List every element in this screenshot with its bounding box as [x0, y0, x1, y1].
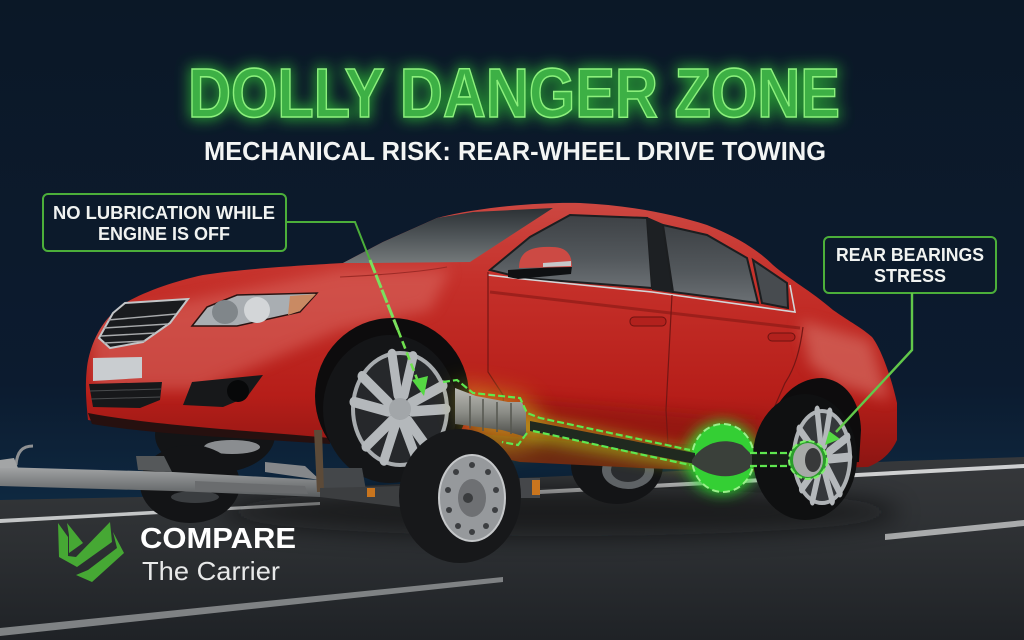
- transmission: [455, 388, 526, 437]
- dolly rim: [439, 455, 505, 541]
- side mirror: [508, 247, 572, 279]
- sill: [465, 430, 755, 472]
- wheel arches: [315, 318, 469, 474]
- far-side wheels: [140, 397, 663, 523]
- windshield: [343, 208, 553, 263]
- driveshaft: [530, 421, 695, 464]
- dolly tyre: [399, 429, 521, 563]
- tow dolly: [0, 429, 540, 563]
- deck plates: [0, 458, 18, 468]
- differential halo: [692, 424, 754, 492]
- rear wheel: [753, 394, 857, 520]
- hitch: [16, 446, 33, 465]
- logo text: COMPARE: [140, 523, 296, 555]
- callout: rear bearings: STRESS: [874, 266, 946, 286]
- title: DOLLY DANGER ZONE: [188, 54, 840, 132]
- door seams: [488, 272, 803, 445]
- logo text: [140, 523, 296, 586]
- window trim: [488, 275, 795, 312]
- car body: [86, 203, 897, 474]
- logo text: The Carrier: [142, 556, 280, 586]
- callout: no lubrication: NO LUBRICATION WHILE: [53, 203, 275, 223]
- rear window: [663, 225, 758, 303]
- door handles: [630, 317, 795, 341]
- right reflector: [520, 478, 540, 498]
- body shell: [86, 203, 897, 470]
- bumper lip: [88, 413, 330, 444]
- road: [0, 457, 1024, 640]
- body highlights: [90, 270, 890, 452]
- strap: [314, 430, 324, 492]
- grille: [99, 299, 188, 348]
- secondary bar: [195, 481, 308, 494]
- fog lamp: [183, 375, 263, 407]
- axle bar: [320, 486, 400, 507]
- lower grille: [89, 382, 162, 408]
- logo mark: [58, 522, 124, 582]
- dolly deck: [320, 468, 366, 490]
- callout: no lubrication: [43, 194, 428, 396]
- car shadow: [220, 488, 900, 536]
- headlight: [192, 293, 317, 326]
- B pillar: [647, 217, 673, 293]
- title: DOLLY DANGER ZONE: [188, 54, 840, 132]
- front wheel: [323, 335, 457, 483]
- callout: no lubrication: ENGINE IS OFF: [98, 224, 230, 244]
- drivetrain highlight: [443, 380, 827, 492]
- callout: rear bearings: REAR BEARINGS: [836, 245, 984, 265]
- hub: [789, 441, 827, 479]
- main trailer bar: [0, 467, 320, 497]
- drivetrain glow: [455, 385, 834, 494]
- axle: [745, 453, 795, 466]
- differential: [692, 441, 752, 476]
- license plate: [93, 357, 142, 381]
- hood seam: [340, 267, 447, 277]
- dashed drivetrain outline: [443, 380, 790, 466]
- subtitle: MECHANICAL RISK: REAR-WHEEL DRIVE TOWING: [204, 136, 826, 166]
- quarter window: [753, 260, 788, 308]
- front window: [490, 215, 652, 288]
- callout: rear bearings: [824, 237, 996, 445]
